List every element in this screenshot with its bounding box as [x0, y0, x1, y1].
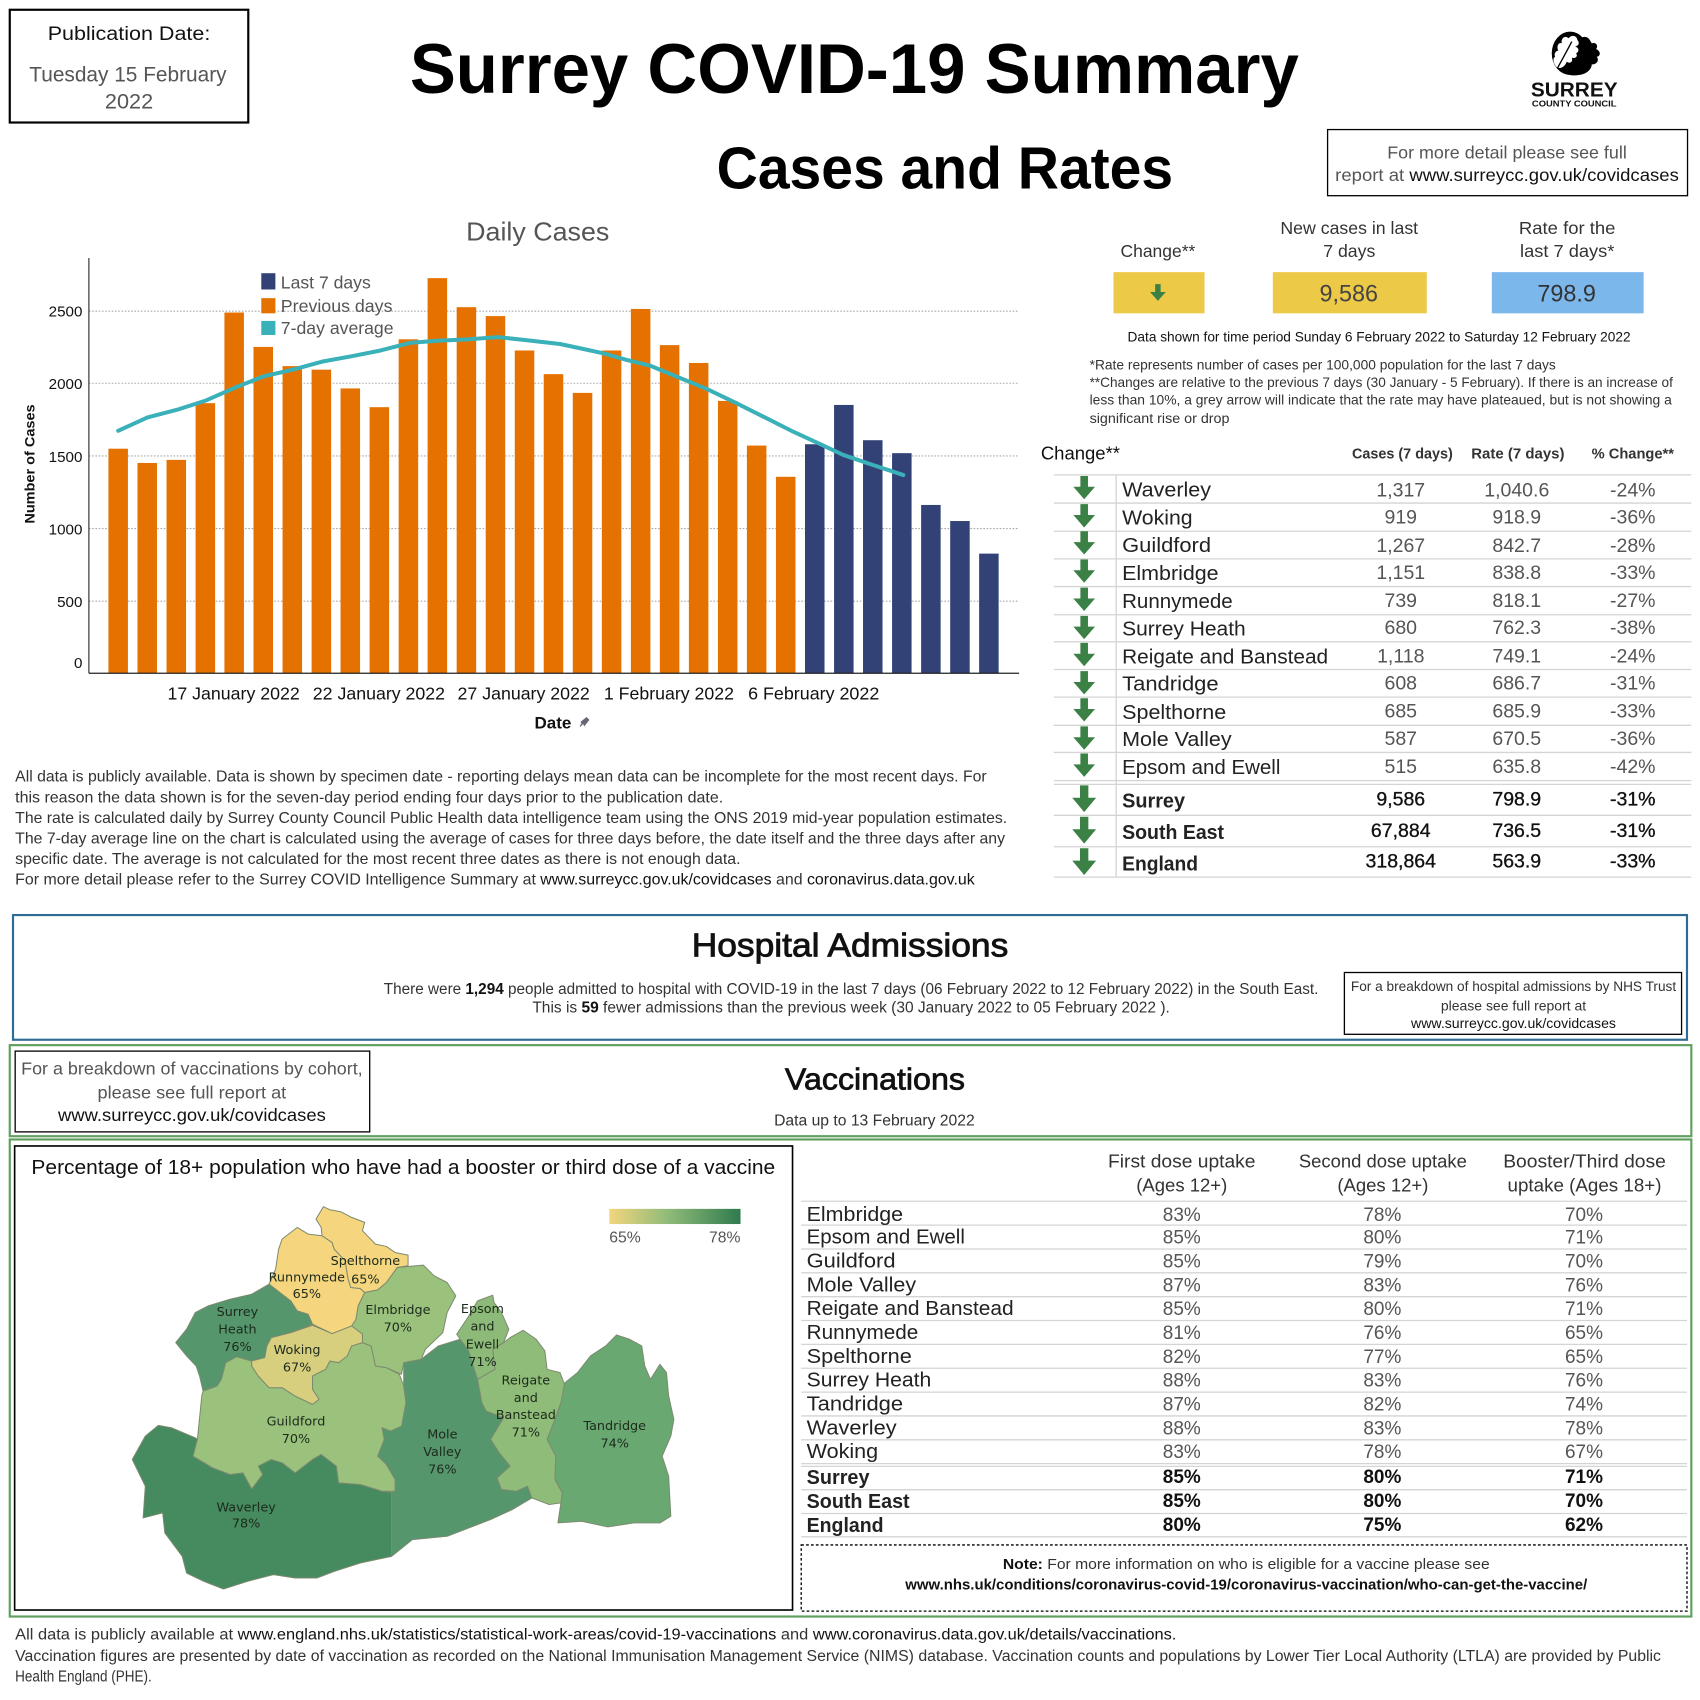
publication date box: Tuesday 15 February [29, 61, 227, 86]
row: Epsom and Ewell: Epsom and Ewell [807, 1227, 965, 1249]
row: Guildford: 1,267 [1376, 535, 1425, 557]
row: Epsom and Ewell: 80% [1363, 1228, 1401, 1249]
data notes text block: The rate is calculated daily by Surrey County Council Public Health data intelligence team using the ONS 2019 mid-year population estimates. [15, 810, 1007, 827]
row: Surrey [807, 1467, 1603, 1489]
row: Woking: 918.9 [1492, 507, 1541, 529]
row: Waverley: 78% [1565, 1418, 1603, 1439]
row: Woking: 78% [1363, 1442, 1401, 1463]
legend: Previous days [281, 296, 393, 316]
row: Surrey: Surrey [1122, 790, 1186, 813]
row: Tandridge: -31% [1610, 673, 1656, 695]
row: South East: -31% [1610, 820, 1656, 842]
row: England [807, 1515, 1603, 1537]
row: Runnymede: Runnymede [807, 1322, 918, 1344]
map labels [216, 1254, 646, 1532]
publication date box: Publication Date: [48, 23, 210, 45]
row: Epsom and Ewell: 635.8 [1492, 756, 1541, 778]
row: Surrey Heath [807, 1370, 1603, 1392]
data notes text block: All data is publicly available. Data is shown by specimen date - reporting delays mean data can be incomplete for the most recent days. For [15, 769, 987, 786]
row: Reigate and Banstead [1073, 643, 1656, 669]
row: Woking: 83% [1163, 1442, 1201, 1463]
y axis labels: 2000 [49, 376, 82, 393]
row: Epsom and Ewell: Epsom and Ewell [1122, 756, 1280, 779]
table header [1108, 1151, 1666, 1196]
map labels: Ewell [466, 1338, 499, 1353]
row: Runnymede [807, 1322, 1603, 1344]
row: Reigate and Banstead: 80% [1363, 1299, 1401, 1320]
row: Elmbridge: 70% [1565, 1205, 1603, 1226]
row: Reigate and Banstead: Reigate and Banstead [1122, 646, 1328, 669]
row: Surrey Heath: 680 [1384, 617, 1417, 639]
row: Epsom and Ewell: -42% [1610, 756, 1656, 778]
panel: vaccinations header [10, 1045, 1691, 1136]
row: Surrey Heath: -38% [1610, 617, 1656, 639]
x axis labels: 22 January 2022 [313, 683, 445, 703]
row: Elmbridge: Elmbridge [807, 1204, 903, 1226]
row: Surrey Heath: 88% [1163, 1371, 1201, 1392]
table header: Cases (7 days) [1352, 446, 1453, 463]
row: Epsom and Ewell [807, 1227, 1603, 1249]
row: Woking: Woking [807, 1441, 878, 1463]
map labels: Woking [274, 1343, 321, 1358]
heading: Hospital Admissions [692, 927, 1008, 964]
row: Runnymede: -27% [1610, 590, 1656, 612]
KPI: new cases: New cases in last [1280, 218, 1418, 238]
region: Mole Valley [378, 1339, 532, 1556]
map labels: Spelthorne [331, 1254, 400, 1269]
row: Surrey Heath: Surrey Heath [807, 1370, 931, 1392]
row: Waverley: -24% [1610, 480, 1656, 502]
map legend [609, 1209, 741, 1246]
logo: Surrey County Council: COUNTY COUNCIL [1532, 98, 1617, 108]
row: England: 62% [1565, 1515, 1603, 1536]
row: Runnymede [1073, 588, 1656, 613]
map labels: 74% [601, 1436, 629, 1451]
row: England: England [807, 1515, 884, 1537]
row: Woking [807, 1441, 1603, 1463]
time period: Data shown for time period Sunday 6 February 2022 to Saturday 12 February 2022 [1128, 329, 1631, 345]
row: Tandridge: 686.7 [1492, 673, 1541, 695]
row: Waverley: 1,040.6 [1484, 480, 1549, 502]
NHS trust callout: For a breakdown of hospital admissions by NHS Trust [1351, 979, 1676, 994]
legend [261, 272, 394, 338]
x axis title: Date [535, 715, 571, 733]
map labels: Banstead [496, 1408, 556, 1423]
footer notes: Vaccination figures are presented by date of vaccination as recorded on the National Immunisation Management Service (NIMS) database. Vaccination counts and populations by Lower Tier Local Authority (LTLA) are provided by Public [15, 1648, 1661, 1665]
table: vaccine uptake [801, 1151, 1687, 1537]
row: Mole Valley [807, 1274, 1603, 1296]
more detail callout: For more detail please see full [1387, 142, 1627, 162]
table header: (Ages 12+) [1136, 1175, 1227, 1196]
x axis labels: 27 January 2022 [458, 683, 590, 703]
KPI: rate: 798.9 [1537, 280, 1596, 307]
map labels: Valley [423, 1445, 462, 1460]
row: Spelthorne: 65% [1565, 1347, 1603, 1368]
row: Reigate and Banstead: 71% [1565, 1299, 1603, 1320]
row: Spelthorne: -33% [1610, 701, 1656, 723]
line: 7-day average [118, 337, 903, 475]
KPI: rate: Rate for the [1519, 218, 1615, 238]
region: Elmbridge [352, 1265, 456, 1374]
row: Mole Valley: 587 [1384, 728, 1417, 750]
row: England: 563.9 [1492, 850, 1541, 872]
map labels: 71% [512, 1426, 540, 1441]
map labels: Runnymede [269, 1271, 345, 1286]
map labels: Heath [218, 1323, 257, 1338]
admissions text [384, 981, 1318, 1017]
row: Mole Valley: -36% [1610, 728, 1656, 750]
table header: % Change** [1592, 446, 1674, 463]
y axis title: Number of Cases [22, 404, 38, 524]
row: Spelthorne: Spelthorne [807, 1346, 912, 1368]
region: Tandridge [547, 1335, 674, 1527]
row: Runnymede: 818.1 [1492, 590, 1541, 612]
data notes text block: this reason the data shown is for the seven-day period ending four days prior to the publication date. [15, 789, 723, 806]
map labels: Elmbridge [365, 1303, 431, 1318]
region: Guildford [193, 1343, 406, 1491]
row: Woking: 67% [1565, 1442, 1603, 1463]
row: Mole Valley: 87% [1163, 1275, 1201, 1296]
row: Tandridge [1073, 671, 1656, 696]
row: Surrey: 798.9 [1492, 789, 1541, 811]
chart: daily cases [22, 217, 1019, 733]
row: Mole Valley [1073, 726, 1656, 751]
row: Mole Valley: Mole Valley [807, 1274, 916, 1296]
admissions text: This is 59 fewer admissions than the previous week (30 January 2022 to 05 February 2022 ). [532, 1000, 1170, 1017]
row: Tandridge: Tandridge [807, 1394, 903, 1416]
row: Tandridge: 87% [1163, 1395, 1201, 1416]
footer notes: All data is publicly available at www.england.nhs.uk/statistics/statistical-work-areas/covid-19-vaccinations and www.coronavirus.data.gov.uk/details/vaccinations. [15, 1626, 1176, 1643]
vaccination breakdown callout [15, 1051, 370, 1132]
row: South East: 80% [1363, 1491, 1401, 1512]
vaccination breakdown callout: For a breakdown of vaccinations by cohort, [21, 1058, 363, 1078]
row: Epsom and Ewell [1073, 754, 1656, 779]
region: Waverley [132, 1425, 392, 1589]
row: Surrey: -31% [1610, 789, 1656, 811]
row: Surrey Heath: 762.3 [1492, 617, 1541, 639]
legend: Last 7 days [281, 272, 371, 292]
row: Waverley [1073, 476, 1656, 502]
row: Spelthorne [1073, 698, 1656, 724]
vaccination breakdown callout: please see full report at [98, 1082, 286, 1102]
NHS trust callout [1344, 973, 1682, 1034]
table header: Rate (7 days) [1471, 446, 1564, 463]
row: Spelthorne: 77% [1363, 1347, 1401, 1368]
KPI: change [1113, 241, 1205, 313]
map labels: 71% [468, 1355, 497, 1370]
footer notes [15, 1626, 1661, 1686]
row: Epsom and Ewell: 71% [1565, 1228, 1603, 1249]
eligibility note: www.nhs.uk/conditions/coronavirus-covid-19/coronavirus-vaccination/who-can-get-the-vaccine/ [904, 1576, 1588, 1593]
map labels: Waverley [216, 1500, 276, 1515]
panel: booster map [15, 1146, 793, 1610]
row: Guildford: 70% [1565, 1251, 1603, 1272]
row: South East: 736.5 [1492, 820, 1541, 842]
KPI: rate [1492, 218, 1644, 313]
KPI: new cases [1273, 218, 1427, 313]
row: Guildford: -28% [1610, 535, 1656, 557]
row: Surrey: 9,586 [1376, 789, 1425, 811]
region: Surrey Heath [176, 1284, 313, 1391]
panel: vaccination data [10, 1139, 1691, 1617]
map labels: Mole [427, 1428, 458, 1443]
row: Elmbridge: 838.8 [1492, 562, 1541, 584]
row: Guildford: 85% [1163, 1251, 1201, 1272]
row: Epsom and Ewell: 85% [1163, 1228, 1201, 1249]
eligibility note: Note: For more information on who is eligible for a vaccine please see [1003, 1556, 1490, 1573]
footnotes: **Changes are relative to the previous 7 days (30 January - 5 February). If there is an increase of [1090, 375, 1673, 390]
heading: Vaccinations [785, 1064, 965, 1097]
row: Tandridge: 74% [1565, 1395, 1603, 1416]
row: England: -33% [1610, 850, 1656, 872]
map labels: 65% [351, 1273, 380, 1288]
KPI: new cases: 7 days [1323, 241, 1375, 261]
data notes text block: The 7-day average line on the chart is calculated using the average of cases for three days before, the date itself and the three days after any [15, 830, 1005, 847]
row: Guildford: 79% [1363, 1251, 1401, 1272]
region: Woking [252, 1325, 362, 1404]
row: Waverley: Waverley [1122, 479, 1212, 502]
row: Guildford: Guildford [807, 1250, 896, 1272]
footnotes: *Rate represents number of cases per 100,000 population for the last 7 days [1090, 358, 1556, 373]
row: Woking [1073, 504, 1656, 530]
data date: Data up to 13 February 2022 [774, 1112, 975, 1129]
NHS trust callout: please see full report at [1441, 998, 1586, 1013]
row: Elmbridge: Elmbridge [1122, 562, 1219, 585]
map labels: 70% [282, 1432, 310, 1447]
row: Guildford: 842.7 [1492, 535, 1541, 557]
row: Woking: 919 [1384, 507, 1417, 529]
map labels: 65% [293, 1287, 321, 1302]
map title: Percentage of 18+ population who have had a booster or third dose of a vaccine [31, 1157, 775, 1179]
data notes text block [15, 769, 1007, 889]
row: Tandridge: Tandridge [1122, 673, 1219, 696]
more detail callout: report at www.surreycc.gov.uk/covidcases [1335, 165, 1679, 185]
x axis labels: 6 February 2022 [748, 683, 879, 703]
vaccination breakdown callout: www.surreycc.gov.uk/covidcases [57, 1105, 326, 1125]
row: Reigate and Banstead [807, 1298, 1603, 1320]
map labels: Reigate [502, 1374, 550, 1389]
row: Runnymede: 65% [1565, 1323, 1603, 1344]
row: Tandridge [807, 1394, 1603, 1416]
row: Elmbridge: 83% [1163, 1205, 1201, 1226]
row: Mole Valley: 83% [1363, 1275, 1401, 1296]
row: England: 75% [1363, 1515, 1401, 1536]
publication date box [10, 10, 248, 123]
row: Reigate and Banstead: 749.1 [1492, 645, 1541, 667]
table header [1041, 443, 1674, 464]
chart title: Daily Cases [466, 217, 609, 247]
region: Spelthorne [316, 1207, 408, 1293]
row: Surrey Heath: 83% [1363, 1371, 1401, 1392]
row: South East: South East [1122, 821, 1224, 844]
y axis labels: 1500 [49, 449, 82, 466]
map labels: 67% [283, 1360, 311, 1375]
row: Surrey: 85% [1163, 1467, 1201, 1488]
row: Surrey: 80% [1363, 1467, 1401, 1488]
map labels: and [470, 1319, 494, 1334]
row: Mole Valley: Mole Valley [1122, 728, 1232, 751]
logo: Surrey County Council: SURREY [1531, 78, 1618, 101]
row: Elmbridge: 78% [1363, 1205, 1401, 1226]
row: Waverley: 88% [1163, 1418, 1201, 1439]
row: Surrey Heath: 76% [1565, 1371, 1603, 1392]
NHS trust callout: www.surreycc.gov.uk/covidcases [1410, 1016, 1616, 1031]
row: Runnymede: 81% [1163, 1323, 1201, 1344]
table header: uptake (Ages 18+) [1508, 1175, 1662, 1196]
row: Surrey [1072, 785, 1656, 813]
choropleth map of Surrey districts [132, 1207, 674, 1589]
row: England: 318,864 [1366, 850, 1436, 872]
map legend: 65% [609, 1229, 641, 1246]
more detail callout [1328, 130, 1688, 196]
y axis labels: 0 [74, 655, 82, 672]
row: Reigate and Banstead: 85% [1163, 1299, 1201, 1320]
footnotes [1090, 358, 1673, 426]
row: Reigate and Banstead: -24% [1610, 645, 1656, 667]
row: Waverley: Waverley [807, 1417, 897, 1439]
x axis labels [168, 683, 879, 703]
panel: hospital admissions [13, 915, 1687, 1040]
section heading: cases and rates: Cases and Rates [717, 135, 1173, 202]
footnotes: significant rise or drop [1090, 411, 1229, 426]
x axis labels: 17 January 2022 [168, 683, 300, 703]
row: Reigate and Banstead: 1,118 [1377, 645, 1424, 667]
row: Waverley: 83% [1363, 1418, 1401, 1439]
map labels: and [514, 1391, 538, 1406]
row: South East: 85% [1163, 1491, 1201, 1512]
row: Woking: Woking [1122, 507, 1193, 530]
row: Spelthorne: 685.9 [1492, 701, 1541, 723]
KPI: rate: last 7 days* [1520, 241, 1614, 261]
row: Guildford: Guildford [1122, 534, 1211, 557]
publication date box: 2022 [105, 88, 153, 113]
eligibility note [801, 1545, 1687, 1611]
map labels: 76% [428, 1462, 457, 1477]
region: Reigate and Banstead [478, 1330, 564, 1505]
row: Elmbridge: -33% [1610, 562, 1656, 584]
region: Epsom and Ewell [457, 1295, 509, 1379]
row: Runnymede: 76% [1363, 1323, 1401, 1344]
row: Epsom and Ewell: 515 [1384, 756, 1417, 778]
y axis labels: 500 [57, 594, 82, 611]
table: cases by area [1041, 443, 1691, 877]
row: Guildford [807, 1250, 1603, 1272]
bars: previous days [108, 278, 795, 673]
admissions text: There were 1,294 people admitted to hospital with COVID-19 in the last 7 days (06 February 2022 to 12 February 2022) in the South East. [384, 981, 1318, 998]
title: Surrey COVID-19 Summary [410, 29, 1299, 108]
row: Tandridge: 82% [1363, 1395, 1401, 1416]
footnotes: less than 10%, a grey arrow will indicate that the rate may have plateaued, but is not showing a [1090, 392, 1672, 407]
map labels: Tandridge [582, 1419, 646, 1434]
row: Spelthorne [807, 1346, 1603, 1368]
region: Runnymede [269, 1227, 365, 1334]
row: Reigate and Banstead: Reigate and Banstead [807, 1298, 1014, 1320]
row: Surrey: Surrey [807, 1467, 870, 1489]
row: Woking: -36% [1610, 507, 1656, 529]
row: Elmbridge [807, 1204, 1603, 1226]
y axis labels: 1000 [49, 522, 82, 539]
row: Spelthorne: 685 [1384, 701, 1417, 723]
map labels: Guildford [267, 1415, 325, 1430]
data notes text block: For more detail please refer to the Surrey COVID Intelligence Summary at www.surreycc.gov.uk/covidcases and coronavirus.data.gov.uk [15, 872, 975, 889]
KPI: new cases: 9,586 [1319, 280, 1378, 307]
map labels: Epsom [461, 1302, 504, 1317]
row: South East: 70% [1565, 1491, 1603, 1512]
row: Spelthorne: Spelthorne [1122, 701, 1226, 724]
table header: Change** [1041, 443, 1120, 464]
footer notes: Health England (PHE). [15, 1669, 152, 1686]
row: Mole Valley: 76% [1565, 1275, 1603, 1296]
row: Surrey Heath [1073, 616, 1656, 640]
x axis title [535, 715, 589, 733]
row: Surrey Heath: Surrey Heath [1122, 617, 1246, 640]
map legend: 78% [709, 1229, 741, 1246]
row: Mole Valley: 670.5 [1492, 728, 1541, 750]
row: Runnymede: 739 [1384, 590, 1417, 612]
row: South East: South East [807, 1491, 910, 1513]
row: Tandridge: 608 [1384, 673, 1417, 695]
map labels: 76% [223, 1340, 252, 1355]
row: Elmbridge: 1,151 [1376, 562, 1425, 584]
table header: Second dose uptake [1299, 1151, 1467, 1172]
table header: (Ages 12+) [1337, 1175, 1428, 1196]
row: England: England [1122, 853, 1198, 876]
row: South East [807, 1491, 1603, 1513]
bars: last 7 days [805, 405, 999, 673]
KPI: change: Change** [1121, 241, 1195, 261]
row: South East [1072, 817, 1656, 844]
row: Waverley [807, 1417, 1603, 1439]
logo: Surrey County Council [1531, 32, 1618, 108]
y axis labels: 2500 [49, 304, 82, 321]
map labels: 70% [384, 1320, 412, 1335]
row: Runnymede: Runnymede [1122, 590, 1233, 613]
row: Elmbridge [1073, 559, 1656, 585]
row: England [1072, 848, 1656, 876]
y axis labels [49, 304, 82, 672]
row: Guildford [1073, 531, 1656, 557]
KPI panel [1090, 218, 1673, 426]
table header: First dose uptake [1108, 1151, 1255, 1172]
map labels: Surrey [217, 1305, 259, 1320]
row: Waverley: 1,317 [1376, 480, 1425, 502]
legend: 7-day average [281, 318, 394, 338]
row: South East: 67,884 [1371, 820, 1431, 842]
map labels: 78% [232, 1517, 260, 1532]
x axis labels: 1 February 2022 [604, 683, 734, 703]
data notes text block: specific date. The average is not calculated for the most recent three dates as there is not enough data. [15, 851, 740, 868]
row: Spelthorne: 82% [1163, 1347, 1201, 1368]
table header: Booster/Third dose [1503, 1151, 1666, 1172]
row: Surrey: 71% [1565, 1467, 1603, 1488]
row: England: 80% [1163, 1515, 1201, 1536]
